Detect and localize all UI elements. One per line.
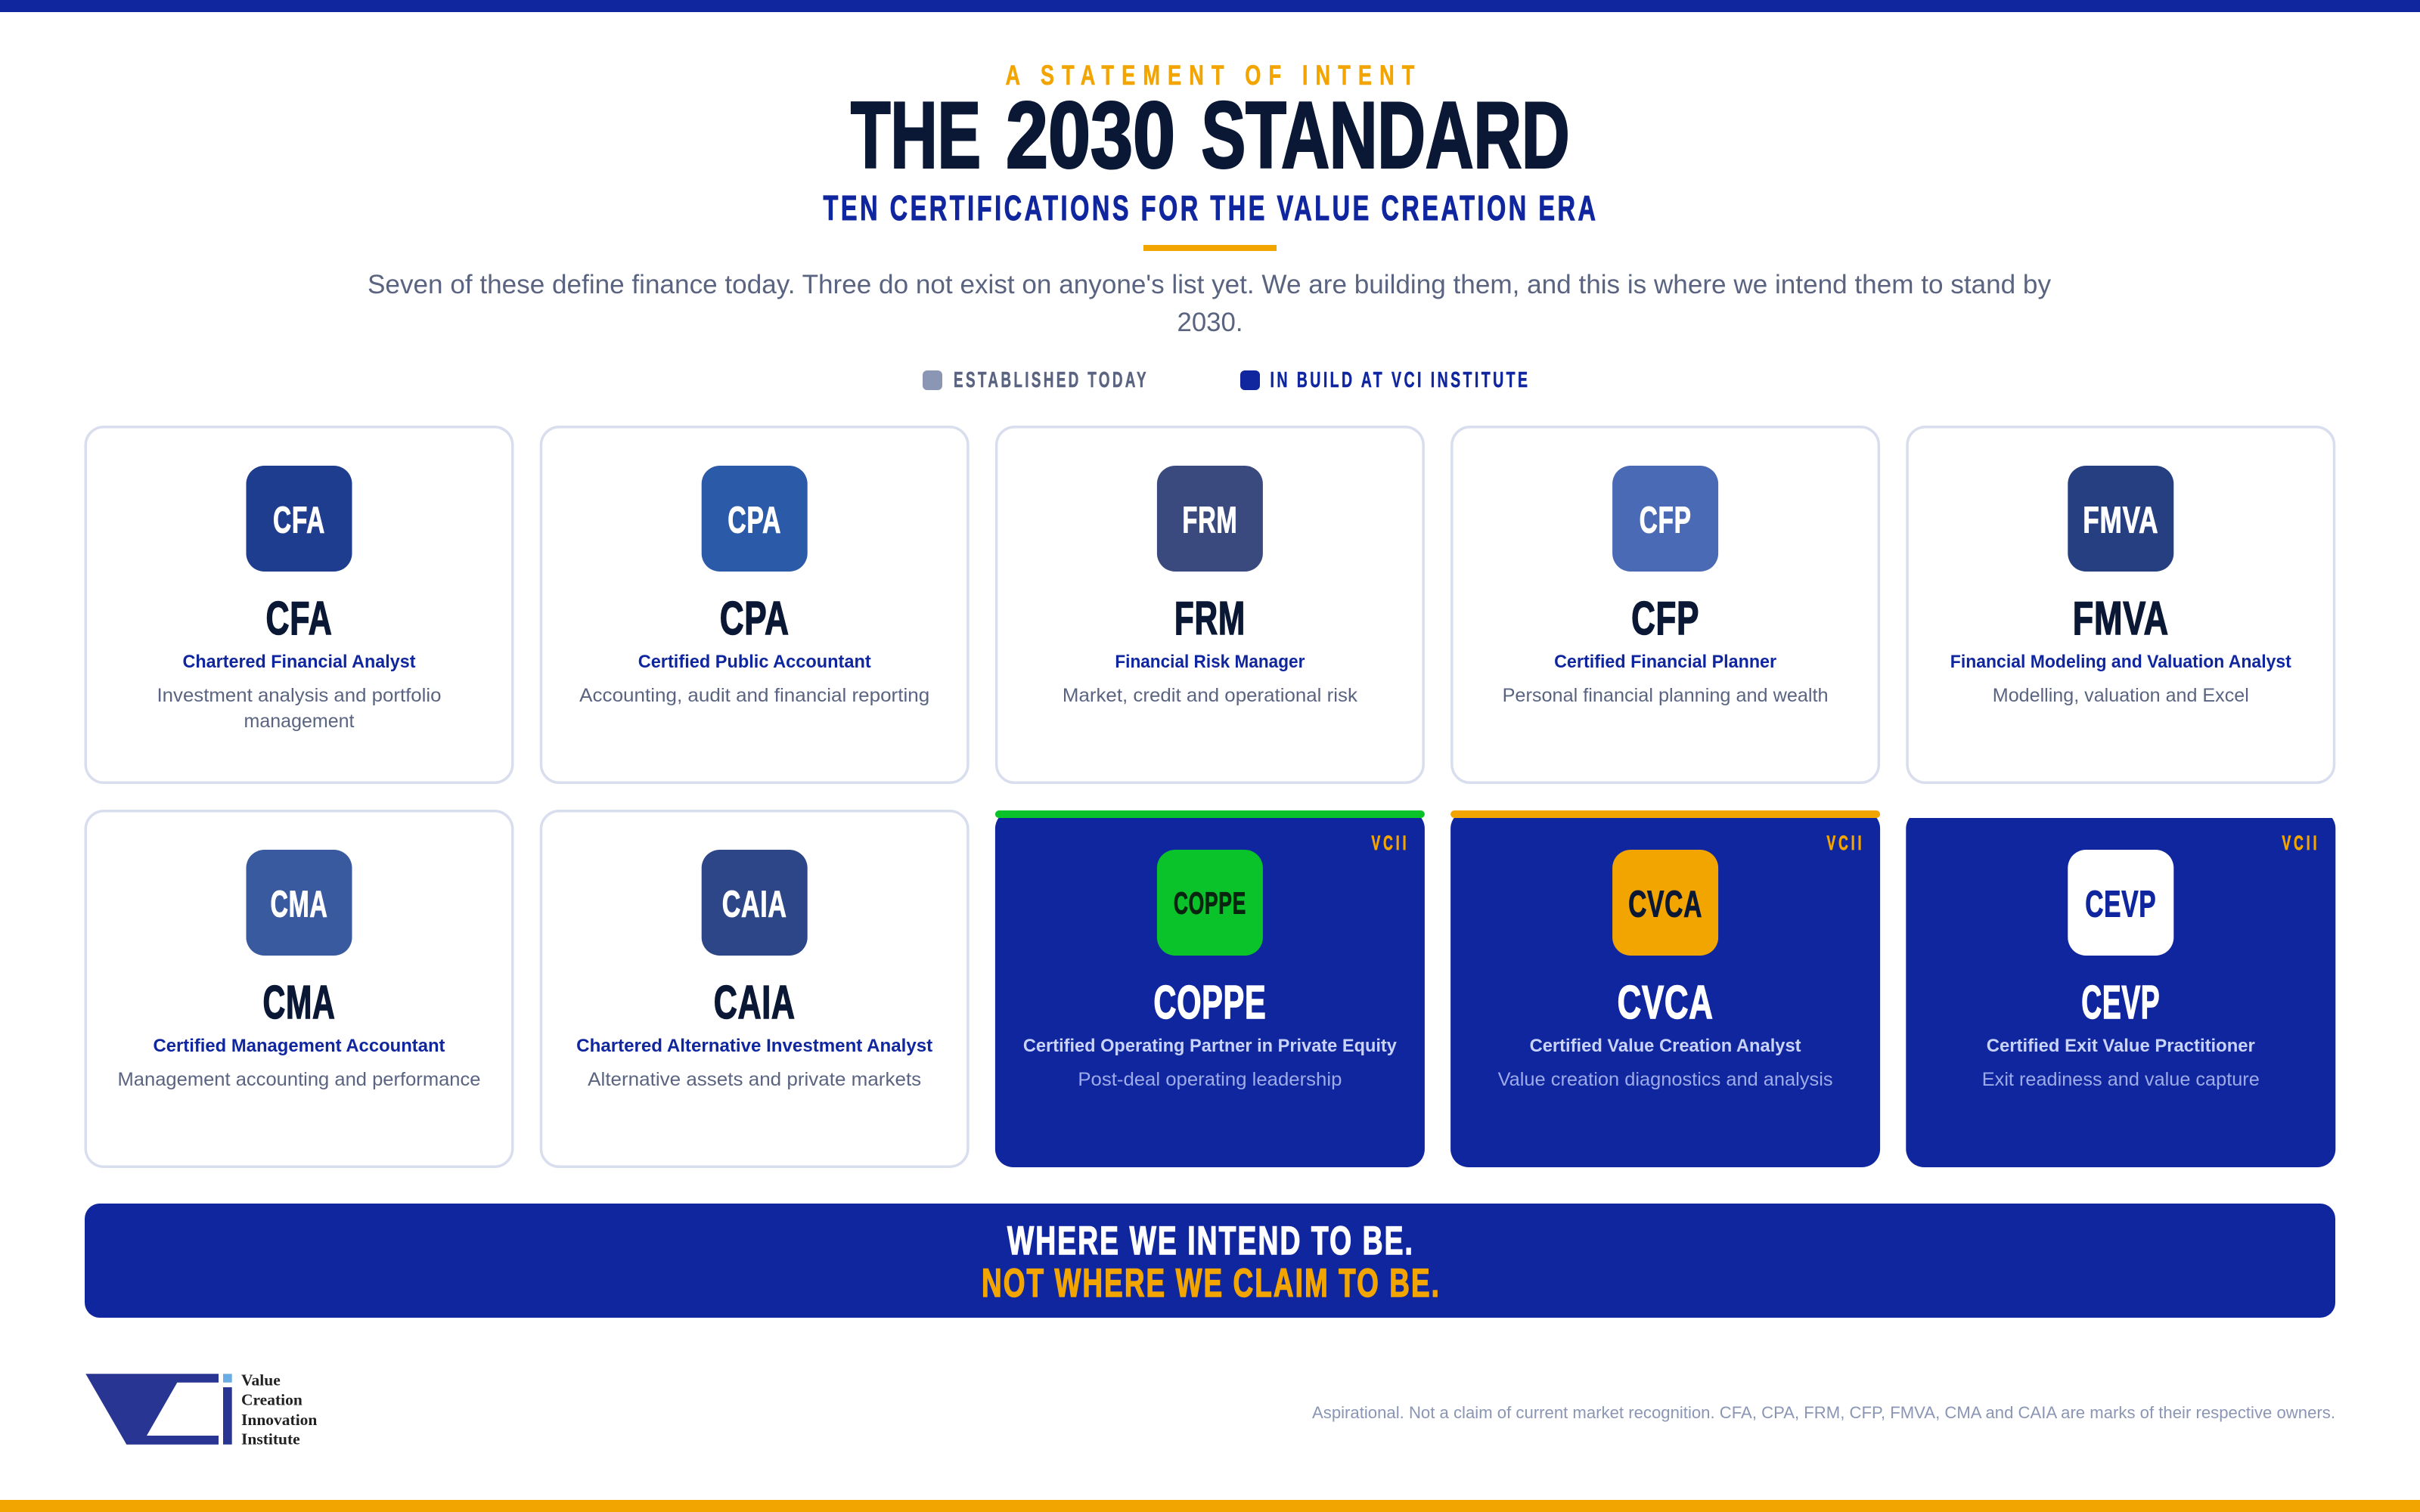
full title: CVCA: Certified Value Creation Analyst [1530, 1036, 1801, 1056]
icon: FRM badge [1157, 466, 1263, 572]
logo wordmark: Value [241, 1371, 281, 1389]
name: CFA: CFA [266, 593, 333, 645]
legend [923, 368, 1531, 392]
card: CPA [541, 427, 968, 782]
accent bar: green [995, 810, 1425, 818]
footnote: Aspirational. Not a claim of current market recognition. CFA, CPA, FRM, CFP, FMVA, CMA and CAIA are marks of their respective owners. [1312, 1403, 2335, 1422]
logo: VCI Institute [85, 1371, 317, 1448]
icon: CFP badge: CFP [1640, 500, 1692, 541]
description: CFP: Personal financial planning and wealth [1503, 685, 1829, 706]
card: FMVA [1907, 427, 2335, 782]
tag: VCII: VCII [2282, 832, 2320, 854]
title: THE [851, 83, 981, 187]
card: CVCA [1450, 810, 1880, 1167]
full title: CPA: Certified Public Accountant [638, 652, 871, 672]
icon: CPA badge: CPA [728, 500, 781, 541]
icon: FRM badge: FRM [1182, 500, 1237, 541]
bottom bar [0, 1500, 2420, 1512]
banner [85, 1204, 2335, 1318]
icon: CFA badge [247, 466, 352, 572]
description: CAIA: Alternative assets and private markets [588, 1069, 921, 1090]
card: FRM [997, 427, 1423, 782]
name: COPPE: COPPE [1153, 977, 1266, 1029]
accent rule [1143, 245, 1277, 251]
icon: CVCA badge [1612, 850, 1718, 956]
icon: CFA badge: CFA [273, 500, 325, 541]
header [368, 59, 2052, 337]
full title: FMVA: Financial Modeling and Valuation Analyst [1950, 652, 2291, 672]
card: CMA [85, 811, 513, 1167]
card: CAIA [541, 811, 968, 1167]
name: CVCA: CVCA [1618, 977, 1714, 1029]
icon: CEVP badge: CEVP [2085, 885, 2156, 925]
legend: established today [923, 368, 1149, 392]
icon: FMVA badge [2068, 466, 2173, 572]
eyebrow: A STATEMENT OF INTENT [1006, 59, 1422, 91]
description: CFA: management [244, 711, 355, 732]
legend: established today: ESTABLISHED TODAY [954, 368, 1149, 392]
logo wordmark: Institute [241, 1430, 300, 1448]
banner line 2: NOT WHERE WE CLAIM TO BE. [982, 1261, 1441, 1306]
icon: CEVP badge [2068, 850, 2173, 956]
icon: CAIA badge: CAIA [722, 885, 787, 925]
full title: CMA: Certified Management Accountant [153, 1036, 445, 1056]
name: CEVP: CEVP [2081, 977, 2160, 1029]
icon: CFP badge [1612, 466, 1718, 572]
top bar [0, 0, 2420, 12]
description: CFA [157, 685, 442, 732]
logo wordmark: Innovation [241, 1411, 317, 1429]
name: CAIA: CAIA [714, 977, 796, 1029]
intro paragraph: 2030. [1177, 308, 1243, 337]
name: CPA: CPA [720, 593, 790, 645]
icon: CMA badge [247, 850, 352, 956]
legend: in build at VCI Institute [1240, 368, 1531, 392]
intro paragraph [368, 270, 2052, 337]
tag: VCII: VCII [1372, 832, 1410, 854]
card: CEVP [1905, 810, 2336, 1167]
legend: in build at VCI Institute: IN BUILD AT VCI INSTITUTE [1270, 368, 1531, 392]
accent bar: amber [1450, 810, 1880, 818]
banner line 1: WHERE WE INTEND TO BE. [1007, 1219, 1414, 1263]
card: COPPE [995, 810, 1425, 1167]
full title: FRM: Financial Risk Manager [1115, 652, 1305, 672]
description: CEVP: Exit readiness and value capture [1982, 1069, 2260, 1090]
card: CFA [85, 427, 513, 782]
intro paragraph: Seven of these define finance today. Three do not exist on anyone's list yet. We are building them, and this is where we intend them to stand by [368, 270, 2052, 299]
logo wordmark: Creation [241, 1391, 302, 1409]
description: CPA: Accounting, audit and financial reporting [579, 685, 929, 706]
full title: COPPE: Certified Operating Partner in Private Equity [1023, 1036, 1398, 1056]
description: CMA: Management accounting and performance [118, 1069, 481, 1090]
title [851, 83, 1570, 187]
icon: CPA badge [702, 466, 808, 572]
description: COPPE: Post-deal operating leadership [1078, 1069, 1342, 1090]
full title: CAIA: Chartered Alternative Investment Analyst [576, 1036, 932, 1056]
full title: CEVP: Certified Exit Value Practitioner [1987, 1036, 2255, 1056]
icon: CVCA badge: CVCA [1628, 885, 1702, 925]
description: CFA: Investment analysis and portfolio [157, 685, 442, 706]
full title: CFA: Chartered Financial Analyst [183, 652, 416, 672]
icon: COPPE badge: COPPE [1174, 886, 1246, 921]
card: CFP [1452, 427, 1879, 782]
icon: FMVA badge: FMVA [2083, 500, 2158, 541]
title: STANDARD [1201, 83, 1570, 187]
full title: CFP: Certified Financial Planner [1554, 652, 1776, 672]
name: FRM: FRM [1174, 593, 1246, 645]
icon: CMA badge: CMA [271, 885, 328, 925]
icon: CAIA badge [702, 850, 808, 956]
description: CVCA: Value creation diagnostics and analysis [1498, 1069, 1833, 1090]
name: CFP: CFP [1631, 593, 1699, 645]
name: CMA: CMA [263, 977, 336, 1029]
logo mark [85, 1374, 232, 1445]
subtitle: TEN CERTIFICATIONS FOR THE VALUE CREATION ERA [823, 188, 1599, 228]
description: FMVA: Modelling, valuation and Excel [1993, 685, 2249, 706]
name: FMVA: FMVA [2073, 593, 2169, 645]
icon: COPPE badge [1157, 850, 1263, 956]
logo wordmark [241, 1371, 317, 1448]
description: FRM: Market, credit and operational risk [1063, 685, 1357, 706]
accent bar: white [1905, 810, 2336, 818]
title: 2030 [1006, 83, 1175, 187]
tag: VCII: VCII [1827, 832, 1865, 854]
